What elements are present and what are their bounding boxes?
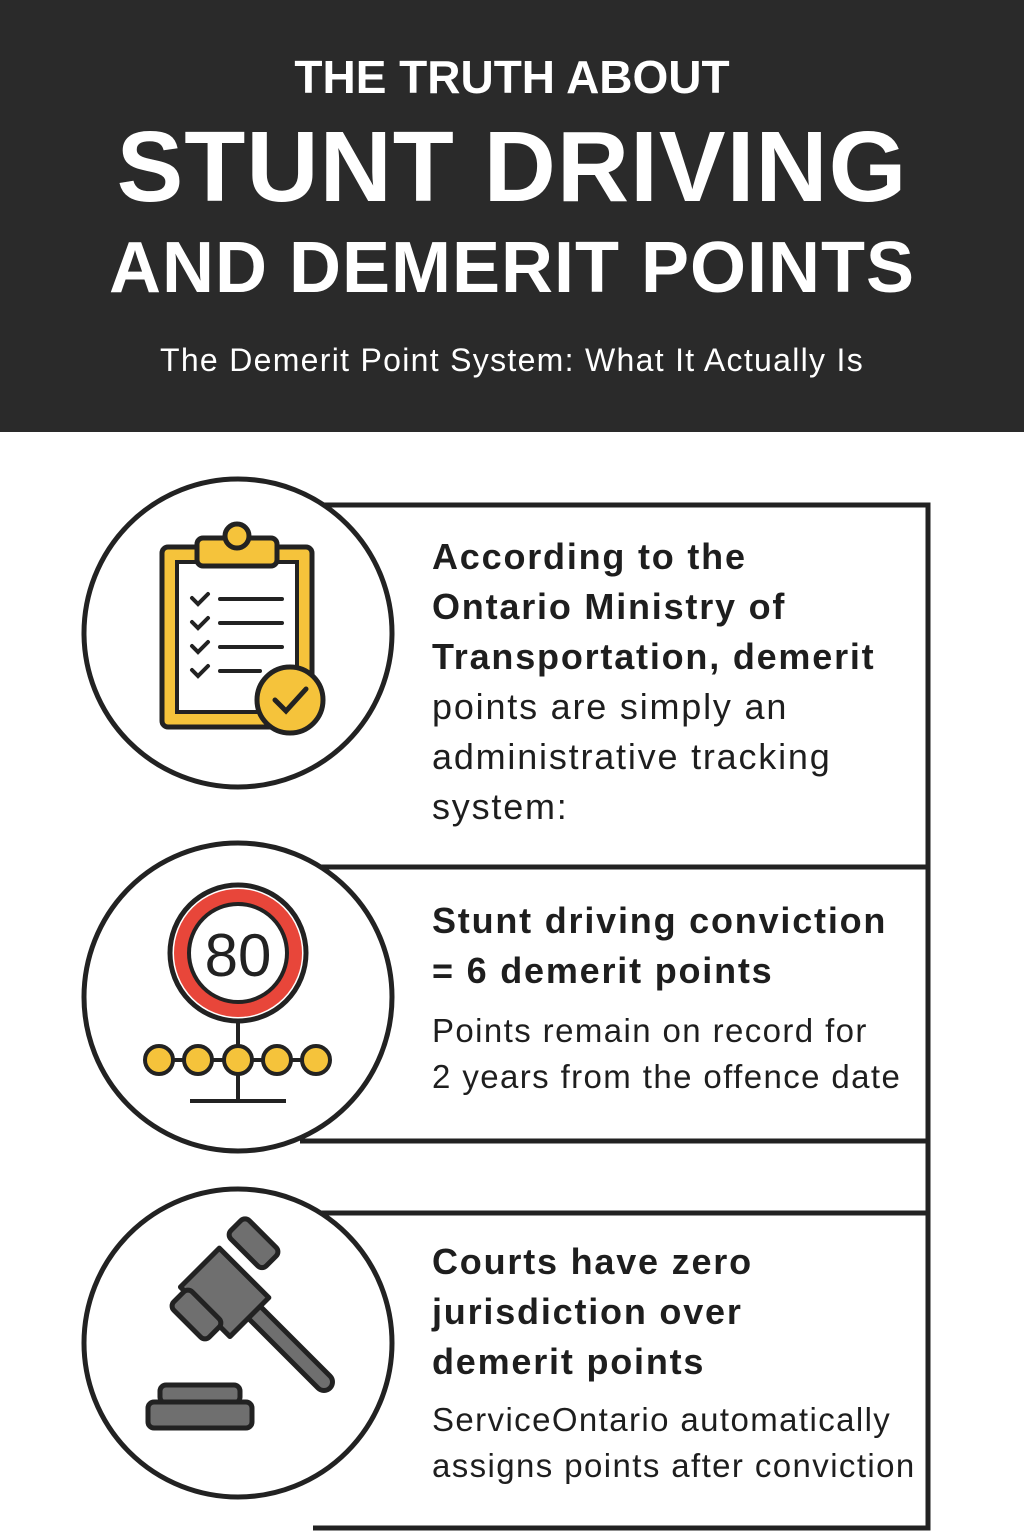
text block 3: Courts have zero (432, 1241, 753, 1282)
text block 2: 2 years from the offence date (432, 1058, 901, 1095)
text block 1: Transportation, demerit (432, 636, 875, 677)
icon: gavel circle (84, 1189, 392, 1497)
text block 1: Ontario Ministry of (432, 586, 786, 627)
title line 3: AND DEMERIT POINTS (109, 228, 915, 308)
text block 1: According to the (432, 536, 747, 577)
text block 2: Points remain on record for (432, 1012, 868, 1049)
icon: speed sign circle: 80 (205, 922, 271, 989)
text block 1: administrative tracking (432, 736, 832, 777)
text block 3: assigns points after conviction (432, 1447, 916, 1484)
text block 1 (432, 536, 875, 827)
title line 1: THE TRUTH ABOUT (294, 51, 730, 103)
text block 2: Stunt driving conviction (432, 900, 887, 941)
subtitle: The Demerit Point System: What It Actually Is (160, 342, 864, 378)
header (0, 0, 1024, 432)
text block 3 (431, 1241, 916, 1484)
text block 2 (432, 900, 901, 1095)
text block 1: system: (432, 786, 569, 827)
text block 1: points are simply an (432, 686, 788, 727)
icon: clipboard circle (84, 479, 392, 787)
text block 3: demerit points (432, 1341, 705, 1382)
title line 2: STUNT DRIVING (117, 111, 907, 223)
icon: speed sign circle (84, 843, 392, 1151)
text block 2: = 6 demerit points (432, 950, 773, 991)
text block 3: ServiceOntario automatically (432, 1401, 891, 1438)
text block 3: jurisdiction over (432, 1291, 743, 1332)
